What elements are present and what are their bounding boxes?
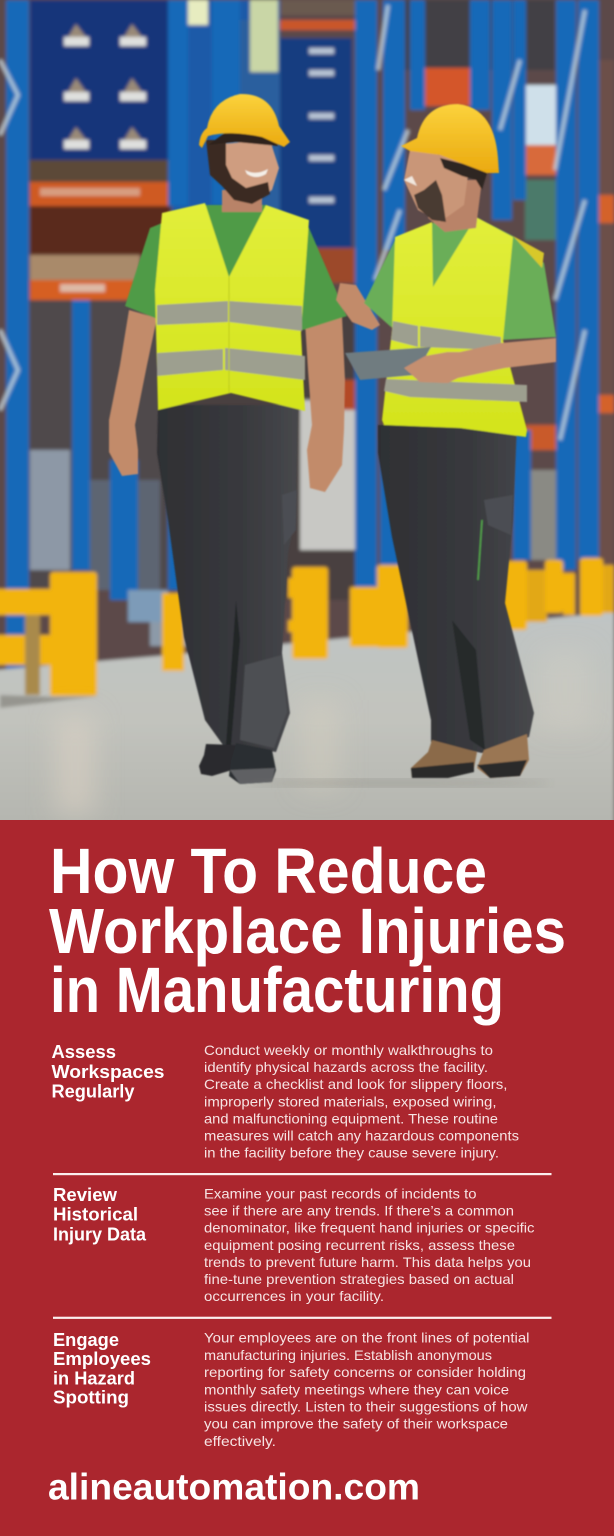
red content panel [48,835,566,1508]
floor reflections [55,650,590,815]
heading: engage employees: Employees [53,1348,151,1369]
body text: engage employees: Your employees are on the front lines of potential [204,1330,530,1346]
title: How To Reduce [50,835,487,907]
heading: review historical data: Historical [53,1204,138,1224]
body text: assess workspaces: identify physical hazards across the facility. [204,1059,488,1075]
body text: engage employees: you can improve the safety of their workspace [204,1416,508,1432]
body text: review historical data: Examine your past records of incidents to [204,1186,477,1202]
body text: assess workspaces: and malfunctioning equipment. These routine [204,1110,498,1126]
heading: review historical data [53,1184,147,1244]
left worker t-shirt [125,205,347,330]
body text: assess workspaces: in the facility before they cause severe injury. [204,1145,499,1161]
heading: engage employees [53,1329,151,1407]
body text: assess workspaces: Conduct weekly or monthly walkthroughs to [204,1042,493,1058]
left worker head and hard hat [199,94,290,212]
tablet [345,347,431,380]
section: review historical data [53,1184,534,1304]
title: Workplace Injuries [49,895,566,967]
website url: alineautomation.com [48,1466,420,1508]
body text: assess workspaces: improperly stored materials, exposed wiring, [204,1093,496,1109]
floor shadow [250,780,550,786]
hero photo: two warehouse workers in hard hats and hi-vis vests walking [0,0,614,820]
left worker arms and hands [109,310,345,492]
body text: assess workspaces: measures will catch any hazardous components [204,1128,519,1144]
right worker pants [378,425,534,753]
body text: review historical data: trends to prevent future harm. This data helps you [204,1254,531,1270]
section: engage employees [53,1329,530,1449]
body text: engage employees: manufacturing injuries. Establish anonymous [204,1347,492,1363]
warehouse background with racks and guard rails [0,0,614,825]
body text: engage employees [204,1330,530,1449]
body text: engage employees: reporting for safety concerns or consider holding [204,1364,526,1380]
heading: engage employees: in Hazard [53,1367,135,1388]
right worker head and hard hat [401,104,499,232]
left worker shoes [199,743,276,784]
body text: review historical data: equipment posing recurrent risks, assess these [204,1237,515,1253]
body text: review historical data [204,1186,534,1304]
heading: engage employees: Engage [53,1329,119,1350]
body text: review historical data: see if there are any trends. If there’s a common [204,1203,514,1219]
heading: engage employees: Spotting [53,1386,129,1407]
body text: engage employees: issues directly. Listen to their suggestions of how [204,1398,528,1414]
body text: engage employees: effectively. [204,1433,276,1449]
heading: review historical data: Injury Data [53,1224,147,1244]
title: in Manufacturing [50,954,504,1026]
right worker [336,104,556,778]
right worker far arm [336,283,380,330]
heading: assess workspaces: Assess [52,1041,116,1062]
right worker hi-vis vest [382,217,527,437]
heading: review historical data: Review [53,1184,118,1205]
body text: assess workspaces [204,1042,519,1161]
heading: assess workspaces [52,1041,164,1102]
heading: assess workspaces: Workspaces [52,1061,164,1082]
body text: engage employees: monthly safety meetings where they can voice [204,1381,509,1397]
left worker [109,94,347,784]
left worker hi-vis vest [155,203,309,411]
right worker boots [411,734,529,778]
title [49,835,566,1026]
left worker pants [157,405,298,752]
body text: review historical data: fine-tune prevention strategies based on actual [204,1271,514,1287]
body text: review historical data: denominator, like frequent hand injuries or specific [204,1220,534,1236]
heading: assess workspaces: Regularly [52,1080,135,1102]
section: assess workspaces [52,1041,519,1161]
right worker t-shirt [364,217,556,340]
body text: assess workspaces: Create a checklist and look for slippery floors, [204,1076,508,1092]
body text: review historical data: occurrences in your facility. [204,1288,384,1304]
right worker near arm [404,338,556,383]
